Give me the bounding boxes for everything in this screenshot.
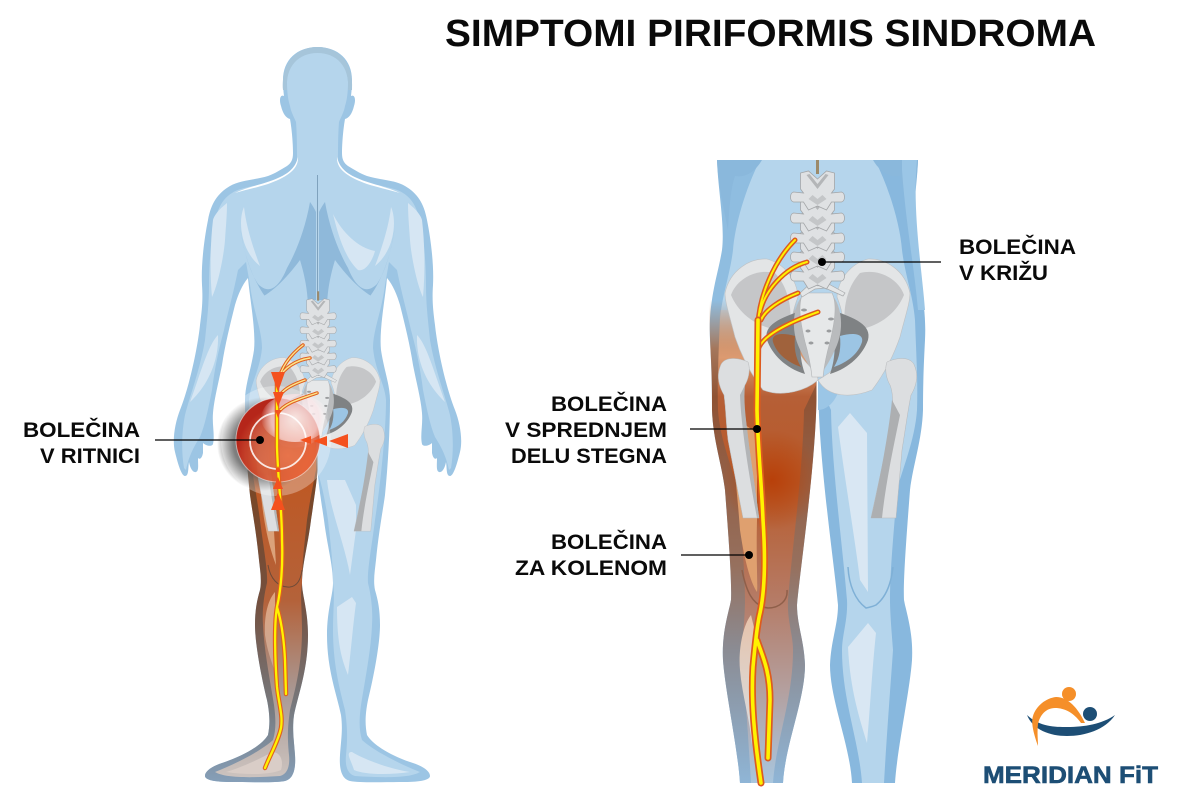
pain glow xyxy=(217,386,331,496)
painful leg overlay xyxy=(710,300,822,783)
skeleton: pelvis, lumbar spine and femurs xyxy=(252,291,385,531)
logo head orange xyxy=(1062,687,1076,701)
callout: bolečina v ritnici xyxy=(23,418,264,468)
back muscles xyxy=(235,157,400,310)
callout: bolečina v ritnici: BOLEČINA xyxy=(23,418,140,442)
torso and legs, mirrored halves xyxy=(710,160,925,783)
logo head blue xyxy=(1083,707,1097,721)
callout: bolečina v sprednjem delu stegna xyxy=(505,392,761,468)
right leg highlights xyxy=(327,480,410,774)
left figure: full body, back view xyxy=(174,47,461,782)
body right half xyxy=(318,47,461,782)
callout: bolečina v križu: BOLEČINA xyxy=(959,235,1076,259)
body left half xyxy=(174,47,318,782)
callout: bolečina v sprednjem delu stegna: BOLEČINA xyxy=(551,392,667,416)
logo: Meridian Fit xyxy=(983,687,1158,789)
head rim xyxy=(283,47,352,90)
right leg highlights xyxy=(838,413,876,743)
painful leg xyxy=(205,420,318,782)
right figure: hips and legs xyxy=(710,160,925,783)
callout: bolečina za kolenom: BOLEČINA xyxy=(551,530,667,554)
sciatic nerve xyxy=(265,345,317,768)
skeleton: pelvis, lumbar spine and femurs xyxy=(718,160,917,518)
callout: bolečina v križu: V KRIŽU xyxy=(959,261,1048,285)
pain arrows xyxy=(271,372,348,510)
callout: bolečina v sprednjem delu stegna: DELU STEGNA xyxy=(511,445,667,468)
callout: bolečina v sprednjem delu stegna: V SPREDNJEM xyxy=(505,419,667,442)
logo wordmark: MERIDIAN FiT xyxy=(983,762,1158,789)
right knee creases xyxy=(848,567,893,608)
callout: bolečina v ritnici: V RITNICI xyxy=(40,445,140,468)
logo swoosh xyxy=(1027,715,1115,736)
sciatic nerve xyxy=(752,240,818,783)
callout: bolečina za kolenom: ZA KOLENOM xyxy=(515,557,667,580)
logo figure xyxy=(1032,697,1085,746)
title: SIMPTOMI PIRIFORMIS SINDROMA xyxy=(445,13,1096,55)
callout: bolečina v križu xyxy=(818,235,1076,285)
callout: bolečina za kolenom xyxy=(515,530,753,580)
